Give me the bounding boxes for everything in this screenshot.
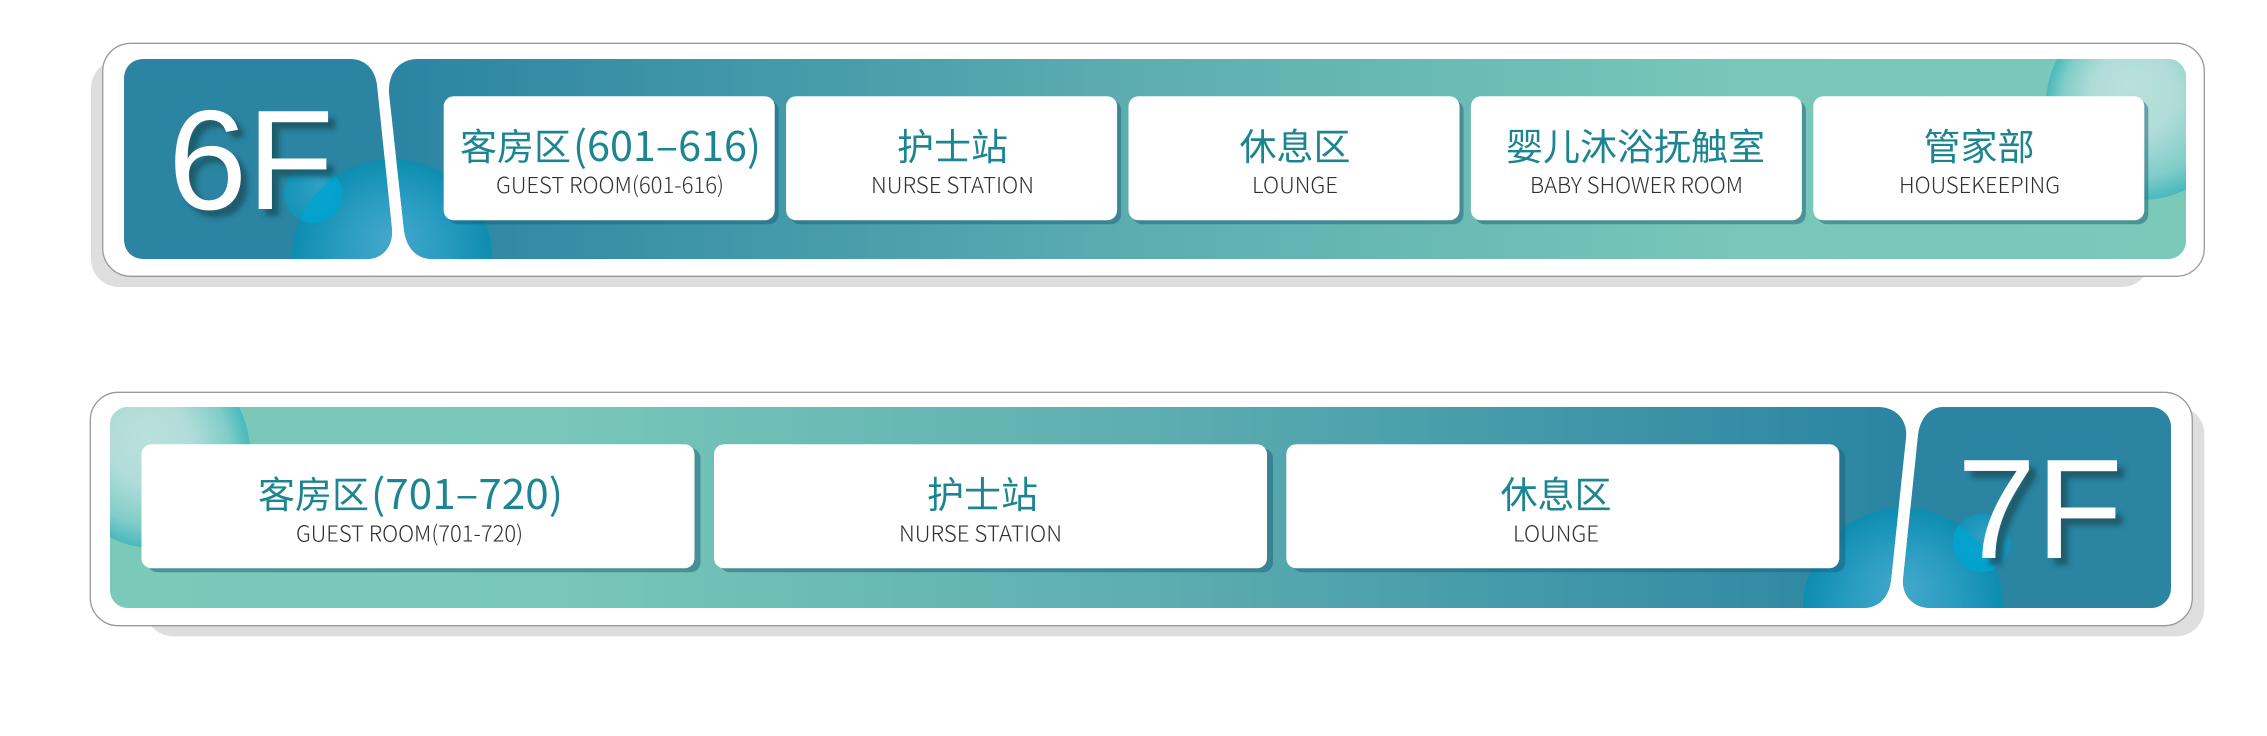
tile background <box>1903 407 2171 608</box>
card: housekeeping: 管家部 <box>1924 127 2034 168</box>
card: guest room 601-616: GUEST ROOM(601-616) <box>496 168 724 200</box>
card: lounge: LOUNGE <box>1513 516 1599 548</box>
floor number: 6F <box>168 81 334 240</box>
card: housekeeping <box>1813 96 2148 224</box>
card: baby shower room: 婴儿沐浴抚触室 <box>1506 127 1765 168</box>
plaque outline <box>103 43 2204 276</box>
floor number: 7F <box>1957 430 2123 589</box>
card: guest room 701-720 <box>142 444 700 572</box>
card: nurse station: 护士站 <box>927 475 1038 516</box>
card: lounge <box>1128 96 1464 224</box>
panel: 7F sign <box>90 392 2204 636</box>
card: nurse station: NURSE STATION <box>871 168 1034 200</box>
card: nurse station: NURSE STATION <box>899 516 1062 548</box>
gradient bar <box>110 407 1906 608</box>
card: nurse station: 护士站 <box>897 127 1008 168</box>
card: nurse station <box>714 444 1273 572</box>
tile bubbles <box>1902 508 2011 608</box>
floor tile: 7F <box>1902 407 2171 608</box>
card: guest room 601-616: 客房区 <box>460 127 571 168</box>
bar bubbles <box>396 59 2186 259</box>
plaque outline <box>90 392 2192 626</box>
floor tile: 6F <box>124 59 392 259</box>
card: guest room 701-720: 客房区 <box>258 475 369 516</box>
card: guest room 601-616 <box>444 96 779 224</box>
card: baby shower room: BABY SHOWER ROOM <box>1530 168 1743 200</box>
tile background <box>124 59 392 259</box>
bar background <box>389 59 2186 259</box>
tile bubbles <box>284 159 392 259</box>
card: lounge <box>1286 444 1845 572</box>
card: housekeeping: HOUSEKEEPING <box>1899 168 2060 200</box>
card: guest room 601-616: (601–616) <box>573 113 761 173</box>
card: guest room 701-720: GUEST ROOM(701-720) <box>296 516 523 548</box>
panel: 6F sign <box>91 42 2205 287</box>
card: lounge: LOUNGE <box>1252 168 1338 200</box>
card: nurse station <box>786 96 1121 224</box>
plaque shadow <box>145 406 2204 636</box>
bar background <box>110 407 1906 608</box>
card: baby shower room <box>1471 96 1806 224</box>
gradient bar <box>388 59 2186 259</box>
card: guest room 701-720: (701–720) <box>371 461 563 521</box>
bar bubbles <box>110 407 1899 608</box>
plaque shadow <box>91 60 2150 287</box>
card: lounge: 休息区 <box>1240 127 1350 168</box>
card: lounge: 休息区 <box>1500 475 1612 516</box>
